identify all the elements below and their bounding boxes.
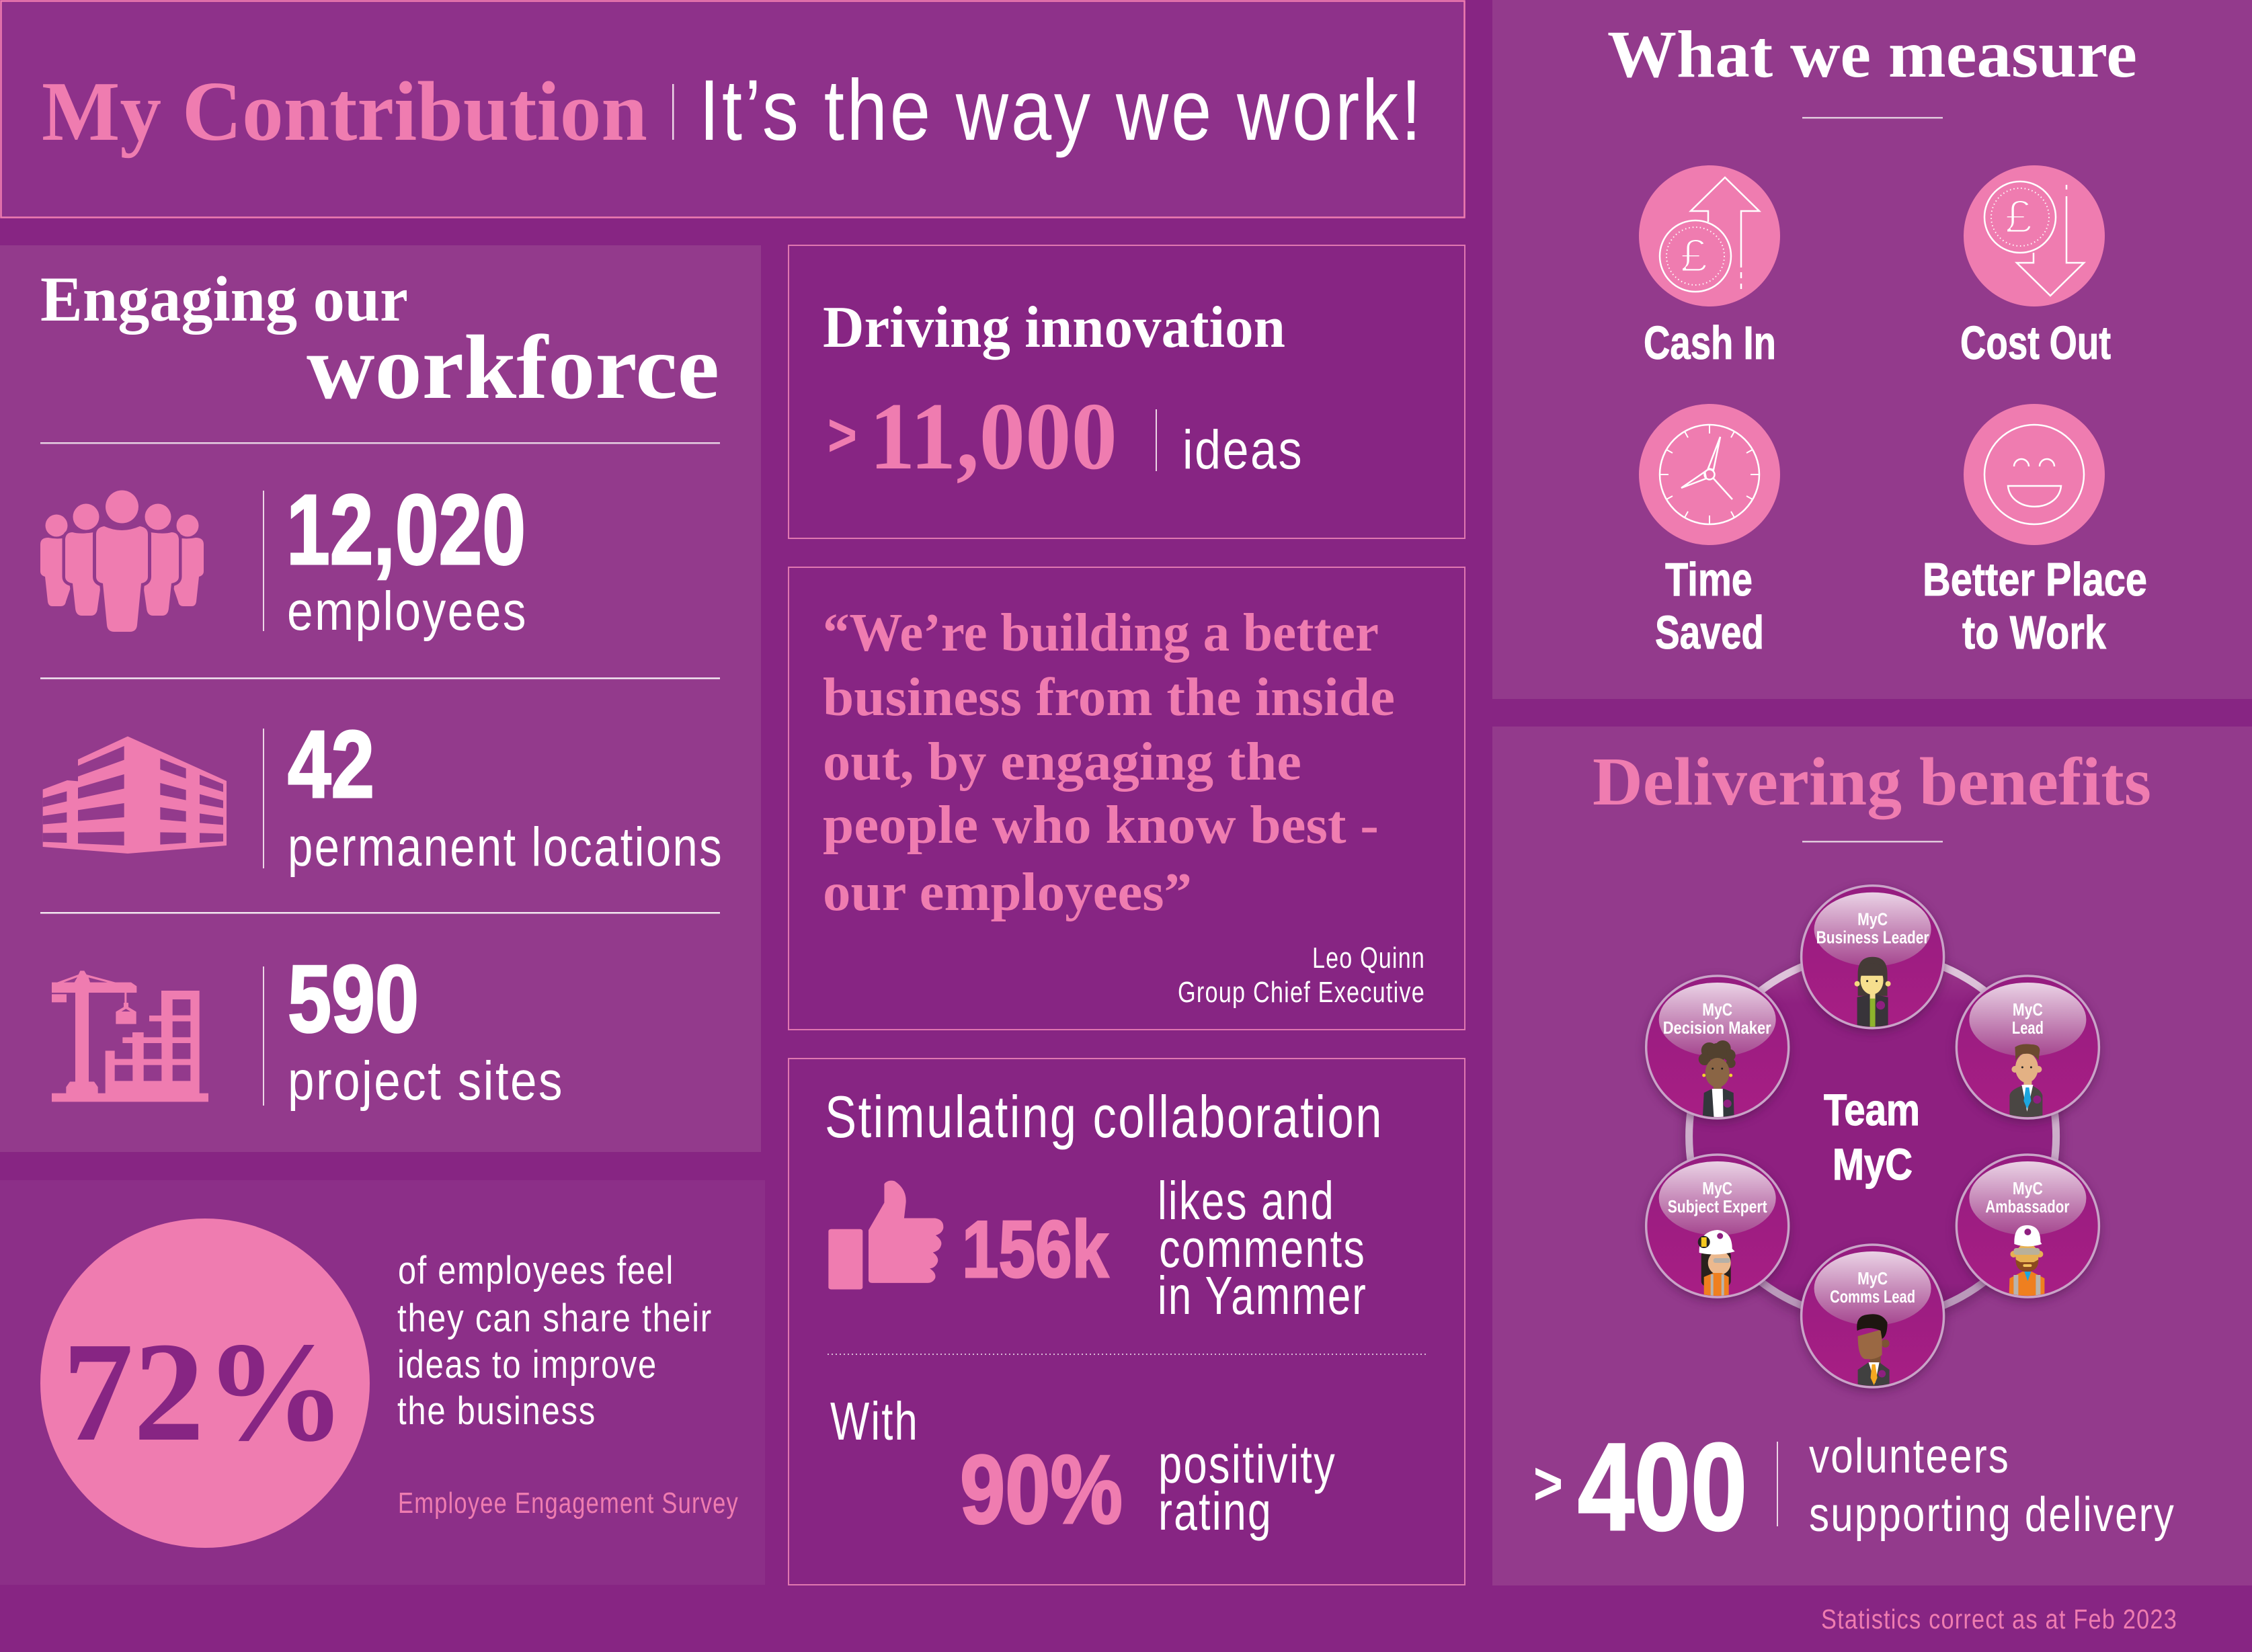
stat: 12,020 employees: 12,020 xyxy=(286,474,526,585)
icon: thumbs up xyxy=(828,1181,943,1290)
label: better place to work: to Work xyxy=(1962,606,2106,659)
source: employee engagement survey: Employee Engagement Survey xyxy=(398,1487,739,1520)
text: positivity rating: rating xyxy=(1158,1481,1273,1541)
stat: 42 permanent locations: 42 xyxy=(288,711,374,818)
diagram: Team MyC ring xyxy=(1645,886,2100,1392)
bubble: MyC Comms Lead: MyC xyxy=(1857,1268,1888,1288)
panel: stimulating collaboration xyxy=(789,1059,1465,1585)
bubble: MyC Subject Expert xyxy=(1645,1155,1790,1302)
circle: 72% xyxy=(40,1219,370,1548)
heading: engaging our workforce: workforce xyxy=(307,317,719,418)
label: Team MyC: Team xyxy=(1824,1085,1920,1134)
text: employee statement: of employees feel xyxy=(398,1249,674,1292)
stat: more than 11,000 ideas: 11,000 xyxy=(869,383,1117,489)
text: employee statement: they can share their xyxy=(397,1296,713,1340)
panel: 72 percent survey xyxy=(0,1180,765,1585)
panel: engaging our workforce xyxy=(0,245,761,1152)
label: better place to work xyxy=(1923,553,2147,659)
panel: what we measure xyxy=(1492,0,2252,699)
quote text: “We’re building a better xyxy=(823,604,1379,663)
text: employee statement: the business xyxy=(397,1389,596,1433)
icon: office building xyxy=(43,737,227,854)
heading: engaging our workforce: Engaging our xyxy=(40,263,408,335)
stat: 12,020 employees xyxy=(286,474,528,642)
text: likes and comments in Yammer: comments xyxy=(1159,1219,1366,1278)
stat: more than 400 xyxy=(1533,1418,1747,1557)
stat: 156k: 156k xyxy=(962,1204,1109,1294)
label: time saved: Time xyxy=(1665,553,1753,606)
text: likes and comments in Yammer: likes and xyxy=(1158,1171,1335,1231)
text: positivity rating xyxy=(1158,1434,1336,1541)
icon: cash in xyxy=(1639,165,1780,306)
bubble: MyC Decision Maker: MyC xyxy=(1702,999,1732,1020)
stat: 590 project sites xyxy=(288,946,564,1112)
attribution: Group Chief Executive xyxy=(1178,976,1425,1009)
label: cash in: Cash In xyxy=(1644,317,1776,369)
heading: stimulating collaboration: Stimulating collaboration xyxy=(825,1083,1383,1150)
character: lead xyxy=(2009,1044,2042,1120)
stat: more than 11,000 ideas: > xyxy=(828,402,857,469)
character: comms lead xyxy=(1857,1314,1890,1389)
bubble: MyC Subject Expert: MyC xyxy=(1702,1178,1732,1198)
label: Team MyC: MyC xyxy=(1833,1139,1913,1189)
character: ambassador xyxy=(2009,1225,2044,1298)
label: time saved: Saved xyxy=(1655,606,1764,659)
bubble: MyC Business Leader xyxy=(1800,886,1945,1033)
bubble: MyC Decision Maker: Decision Maker xyxy=(1663,1018,1771,1038)
text: employee statement: ideas to improve xyxy=(397,1343,657,1387)
quote text: business from the inside xyxy=(823,668,1395,727)
text: employee statement xyxy=(397,1249,713,1433)
text: volunteers supporting delivery: supporting delivery xyxy=(1809,1488,2175,1542)
icon: cost out xyxy=(1964,165,2105,306)
heading: engaging our workforce xyxy=(40,263,719,418)
icon: crane and construction site xyxy=(52,970,208,1102)
icon: group of people xyxy=(40,491,204,632)
label: cost out: Cost Out xyxy=(1960,317,2111,369)
bubble: MyC Lead: MyC xyxy=(2013,999,2043,1020)
panel: delivering benefits xyxy=(1492,727,2252,1585)
panel: title banner xyxy=(1,1,1464,218)
stat: 90%: 90% xyxy=(960,1435,1123,1544)
stat: 590 project sites: 590 xyxy=(288,946,419,1052)
label: time saved xyxy=(1655,553,1764,659)
stat: more than 400: > xyxy=(1533,1450,1563,1518)
stat: more than 11,000 ideas: ideas xyxy=(1182,419,1303,481)
bubble: MyC Lead xyxy=(1955,976,2100,1123)
heading: driving innovation: Driving innovation xyxy=(823,295,1285,360)
heading: what we measure: What we measure xyxy=(1607,17,2137,91)
text: positivity rating: positivity xyxy=(1158,1434,1336,1494)
stat: more than 11,000 ideas xyxy=(828,383,1303,489)
title: My Contribution: My Contribution xyxy=(42,65,647,159)
character: subject expert xyxy=(1698,1230,1735,1298)
stat: 42 permanent locations xyxy=(288,711,723,878)
bubble: MyC Ambassador xyxy=(1955,1155,2100,1302)
character: decision maker xyxy=(1699,1040,1736,1120)
stat: 42 permanent locations: permanent locations xyxy=(288,817,723,878)
panel: driving innovation xyxy=(789,245,1465,538)
quote text xyxy=(823,604,1395,922)
label: Team MyC xyxy=(1824,1085,1920,1189)
icon: cash in: £ xyxy=(1680,229,1710,282)
bubble: MyC Subject Expert: Subject Expert xyxy=(1668,1196,1767,1216)
text: volunteers supporting delivery xyxy=(1809,1430,2175,1542)
footnote: statistics date: Statistics correct as at Feb 2023 xyxy=(1821,1604,2177,1635)
bubble: MyC Comms Lead xyxy=(1800,1245,1945,1392)
subtitle: It's the way we work: It’s the way we work! xyxy=(699,63,1424,159)
character: business leader xyxy=(1855,957,1891,1030)
bubble: MyC Decision Maker xyxy=(1645,976,1790,1123)
text: volunteers supporting delivery: volunteers xyxy=(1809,1430,2010,1483)
bubble: MyC Ambassador: Ambassador xyxy=(1985,1196,2069,1216)
bubble: MyC Lead: Lead xyxy=(2012,1018,2044,1038)
heading: delivering benefits: Delivering benefits xyxy=(1593,744,2151,820)
icon: smiley face xyxy=(1964,404,2105,545)
label: better place to work: Better Place xyxy=(1923,553,2147,606)
bubble: MyC Ambassador: MyC xyxy=(2013,1178,2043,1198)
quote text: people who know best - xyxy=(823,796,1379,855)
bubble: MyC Comms Lead: Comms Lead xyxy=(1830,1286,1915,1307)
text: likes and comments in Yammer xyxy=(1158,1171,1367,1325)
quote text: our employees” xyxy=(823,863,1192,922)
bubble: MyC Business Leader: Business Leader xyxy=(1816,927,1929,948)
text: likes and comments in Yammer: in Yammer xyxy=(1158,1266,1367,1325)
panel: quote xyxy=(789,567,1465,1030)
bubble: MyC Business Leader: MyC xyxy=(1857,909,1888,930)
stat: 12,020 employees: employees xyxy=(287,581,528,642)
attribution xyxy=(1178,942,1425,1009)
stat: 590 project sites: project sites xyxy=(288,1050,564,1112)
text: With: With xyxy=(830,1391,919,1451)
stat: more than 400: 400 xyxy=(1578,1418,1747,1557)
attribution: Leo Quinn xyxy=(1312,942,1425,975)
quote text: out, by engaging the xyxy=(823,733,1301,792)
icon: cost out: £ xyxy=(2005,190,2034,243)
circle: 72%: 72% xyxy=(63,1313,346,1471)
icon: clock xyxy=(1639,404,1780,545)
